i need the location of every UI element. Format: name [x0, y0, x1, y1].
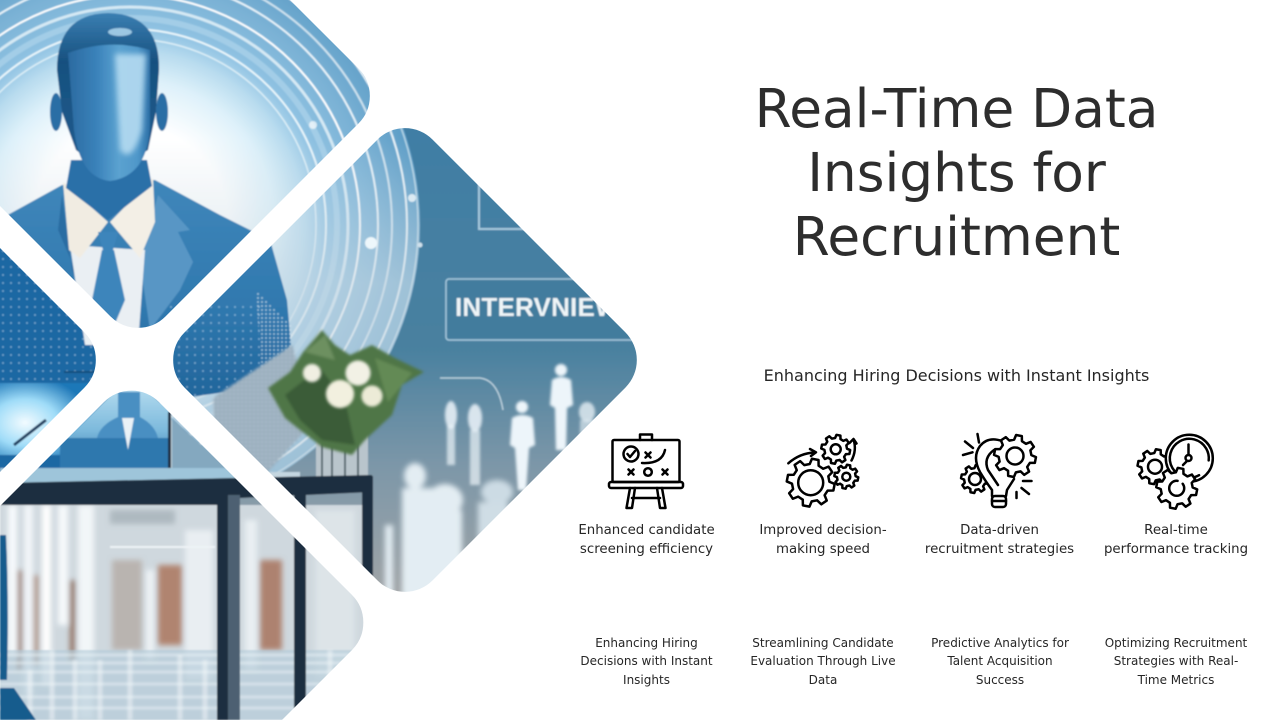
blue wall background	[239, 128, 637, 592]
wall panels with INTERVNIEW label: INTERVNIEW	[455, 292, 620, 322]
label: screening: Enhanced candidate	[578, 523, 715, 538]
label: decision speed: making speed	[776, 542, 870, 557]
halo and concentric rings	[0, 0, 422, 515]
label: strategies	[925, 523, 1074, 557]
title: Recruitment	[793, 206, 1120, 268]
caption: candidate evaluation: Streamlining Candidate	[752, 636, 894, 650]
label: decision speed	[759, 523, 887, 557]
mesh band below the suit	[212, 345, 303, 472]
label: screening: screening efficiency	[580, 542, 713, 557]
caption: predictive analytics: Success	[976, 673, 1024, 687]
blurred crowd	[385, 463, 513, 600]
caption: optimizing strategies: Strategies with Real-	[1114, 654, 1238, 668]
caption: predictive analytics	[931, 636, 1069, 687]
man: left sleeve and laptop glow	[0, 248, 96, 472]
icon: gears with arrows	[783, 432, 860, 511]
title: Insights for	[807, 142, 1106, 204]
caption: hiring decisions	[580, 636, 713, 687]
photo collage: four rounded diamonds	[0, 0, 637, 720]
caption: hiring decisions: Enhancing Hiring	[595, 636, 698, 650]
floating people figures	[445, 364, 595, 490]
monitor on table	[0, 390, 301, 498]
subtitle: Enhancing Hiring Decisions with Instant Insights	[764, 366, 1149, 385]
caption: hiring decisions: Decisions with Instant	[580, 654, 713, 668]
title: Real-Time Data	[755, 78, 1158, 140]
caption: optimizing strategies: Time Metrics	[1138, 673, 1214, 687]
icon: gears with clock	[1135, 432, 1216, 512]
caption: optimizing strategies	[1105, 636, 1247, 687]
icon: light bulb with gears	[959, 432, 1039, 507]
man: shirt, collar, tie	[63, 178, 155, 345]
caption: candidate evaluation: Data	[809, 673, 837, 687]
console vase and flowers	[268, 330, 424, 477]
black console table	[0, 475, 373, 720]
label: tracking: Real-time	[1144, 523, 1208, 538]
wall panels with INTERVNIEW label	[440, 180, 646, 410]
label: strategies: Data-driven	[960, 523, 1039, 538]
label: tracking	[1104, 523, 1248, 557]
caption: hiring decisions: Insights	[623, 673, 670, 687]
man: suit	[8, 179, 292, 403]
glass cabinet with streaks	[0, 505, 372, 720]
man: head	[50, 13, 168, 220]
caption: optimizing strategies: Optimizing Recruitment	[1105, 636, 1247, 650]
label: tracking: performance tracking	[1104, 542, 1248, 557]
caption: candidate evaluation	[750, 636, 896, 687]
title	[755, 78, 1158, 268]
label: screening	[578, 523, 715, 557]
icons row	[608, 432, 1214, 510]
label: decision speed: Improved decision-	[759, 523, 887, 538]
label: strategies: recruitment strategies	[925, 542, 1074, 557]
caption: candidate evaluation: Evaluation Through Live	[750, 654, 896, 668]
icon: strategy whiteboard	[609, 434, 683, 508]
caption: predictive analytics: Talent Acquisition	[947, 654, 1053, 668]
caption: predictive analytics: Predictive Analytics for	[931, 636, 1069, 650]
